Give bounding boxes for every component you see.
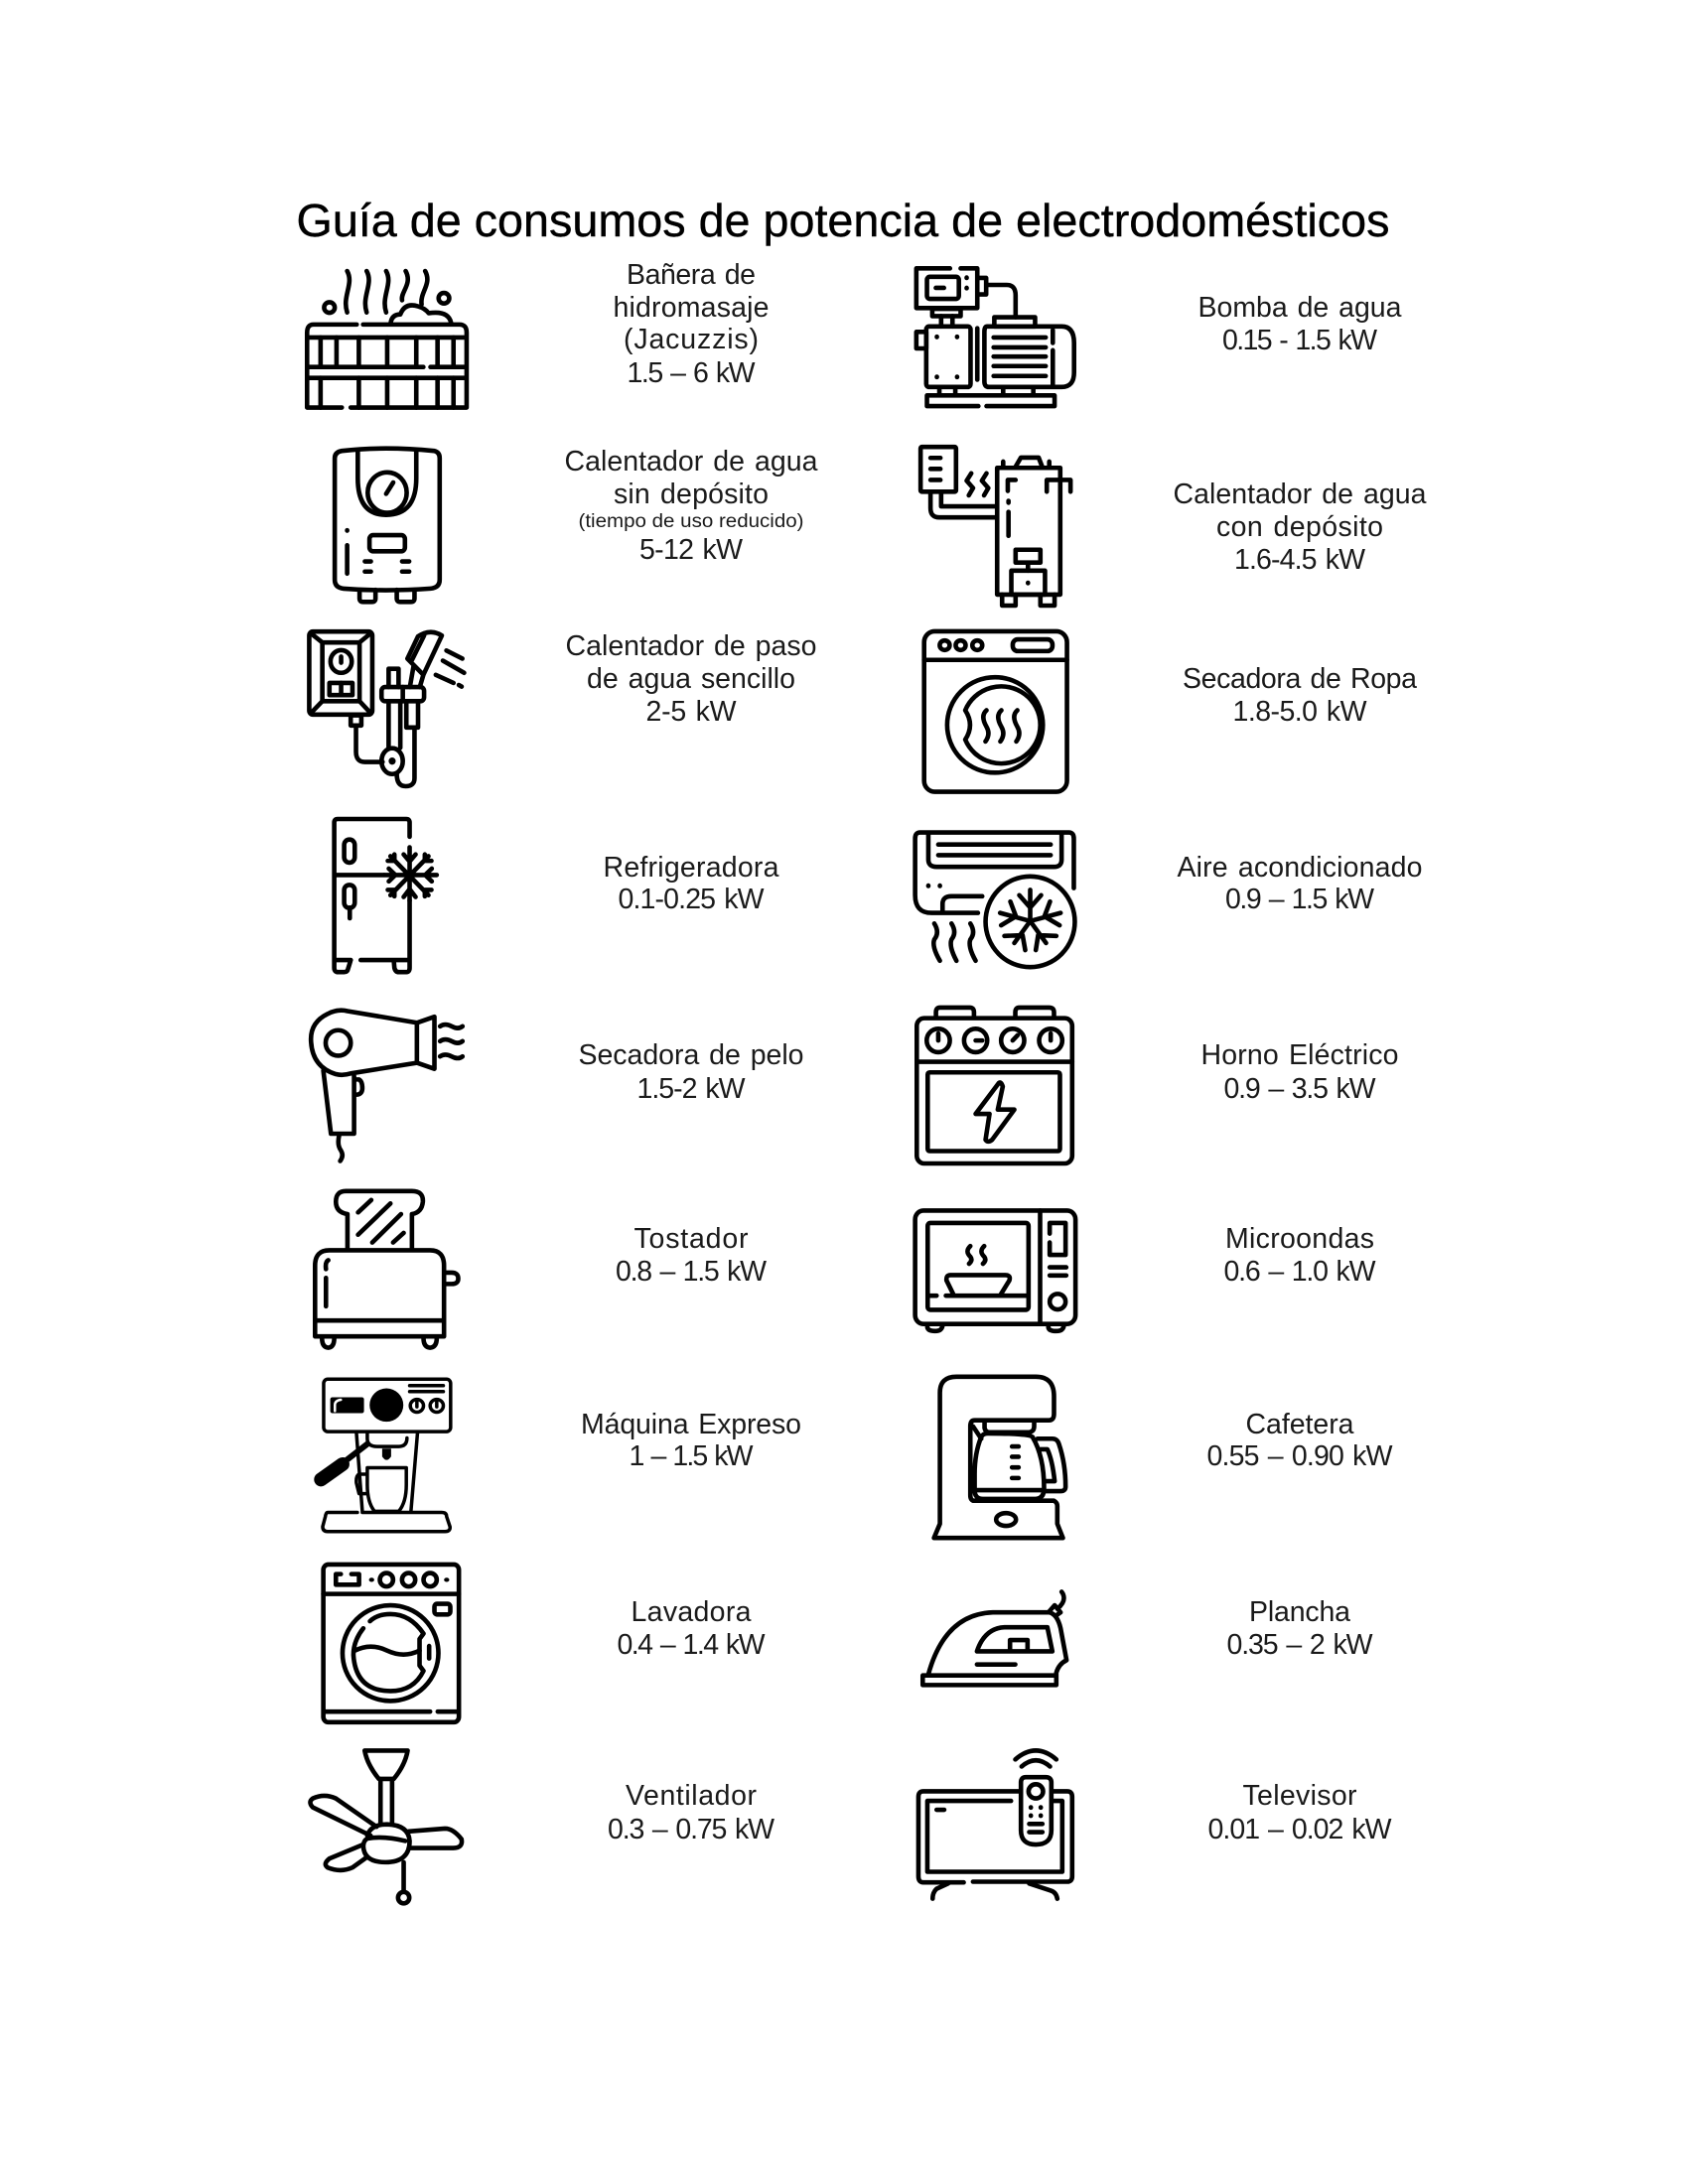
icon: espresso machine (321, 1379, 451, 1532)
label: electric oven: Horno Eléctrico (1201, 1039, 1398, 1071)
label: tankless water heater: sin depósito (614, 478, 769, 510)
label: clothes dryer (1183, 663, 1417, 728)
label: espresso machine: Máquina Expreso (581, 1409, 801, 1440)
label: television: 0.01 – 0.02 kW (1207, 1814, 1392, 1845)
label: hair dryer: Secadora de pelo (578, 1039, 804, 1071)
icon: hair dryer (311, 1011, 463, 1160)
label: refrigerator: 0.1-0.25 kW (618, 884, 765, 915)
label: ceiling fan: Ventilador (626, 1780, 757, 1812)
label: air conditioner: 0.9 – 1.5 kW (1225, 884, 1374, 915)
label: tank water heater: con depósito (1216, 511, 1383, 543)
label: electric oven: 0.9 – 3.5 kW (1223, 1073, 1376, 1105)
label: clothes dryer: Secadora de Ropa (1183, 663, 1417, 695)
icon: instant shower heater (309, 631, 464, 786)
label: electric oven (1201, 1039, 1398, 1105)
label: washing machine: 0.4 – 1.4 kW (618, 1629, 766, 1661)
label: television: Televisor (1243, 1780, 1357, 1812)
label: coffee maker (1207, 1409, 1393, 1472)
label: hot tub (614, 259, 769, 389)
icon: microwave (915, 1210, 1075, 1331)
label: water pump: Bomba de agua (1197, 292, 1402, 324)
label: clothes iron: 0.35 – 2 kW (1227, 1629, 1373, 1661)
icon: washing machine (324, 1565, 459, 1722)
label: washing machine: Lavadora (632, 1596, 752, 1628)
label: instant shower heater: 2-5 kW (645, 696, 737, 728)
label: coffee maker: Cafetera (1245, 1409, 1354, 1440)
label: hair dryer (578, 1039, 804, 1105)
icon: clothes iron (922, 1591, 1066, 1685)
label: microwave: 0.6 – 1.0 kW (1223, 1256, 1376, 1288)
label: hot tub: hidromasaje (614, 292, 769, 324)
label: air conditioner (1178, 852, 1422, 915)
label: television (1207, 1780, 1392, 1845)
label: water pump (1197, 292, 1402, 356)
label: clothes iron (1227, 1596, 1373, 1661)
label: ceiling fan (608, 1780, 774, 1845)
label: hot tub: Bañera de (627, 259, 756, 291)
icon: hot tub (307, 271, 467, 408)
title: Guía de consumos de potencia de electrodomésticos (296, 195, 1390, 246)
icon: tankless water heater (335, 449, 440, 602)
label: hot tub: 1.5 – 6 kW (628, 357, 756, 389)
label: coffee maker: 0.55 – 0.90 kW (1207, 1440, 1393, 1472)
label: microwave (1223, 1223, 1376, 1288)
label: toaster: 0.8 – 1.5 kW (616, 1256, 767, 1288)
icon: electric oven (916, 1008, 1072, 1163)
label: hair dryer: 1.5-2 kW (637, 1073, 746, 1105)
label: tank water heater: 1.6-4.5 kW (1234, 544, 1365, 576)
label: tankless water heater: Calentador de agua (564, 446, 818, 478)
icon: television with remote (918, 1750, 1072, 1899)
label: toaster (616, 1223, 767, 1288)
label: espresso machine: 1 – 1.5 kW (630, 1440, 754, 1472)
label: instant shower heater: Calentador de paso (566, 630, 816, 662)
icon: water pump (916, 268, 1074, 406)
icon: refrigerator (335, 819, 437, 972)
label: instant shower heater: de agua sencillo (587, 663, 795, 695)
icon: tank water heater (920, 447, 1070, 606)
label: instant shower heater (566, 630, 816, 728)
label: espresso machine (581, 1409, 801, 1472)
label: refrigerator: Refrigeradora (604, 852, 779, 884)
icon: air conditioner (915, 833, 1074, 967)
label: clothes dryer: 1.8-5.0 kW (1233, 696, 1367, 728)
label: tankless water heater (564, 446, 818, 566)
label: ceiling fan: 0.3 – 0.75 kW (608, 1814, 774, 1845)
label: toaster: Tostador (633, 1223, 749, 1255)
icon: coffee maker (934, 1377, 1065, 1538)
label: tank water heater (1174, 478, 1427, 576)
label: microwave: Microondas (1225, 1223, 1374, 1255)
icon: toaster (315, 1191, 458, 1348)
label: tank water heater: Calentador de agua (1174, 478, 1427, 510)
label: clothes iron: Plancha (1249, 1596, 1350, 1628)
label: water pump: 0.15 - 1.5 kW (1222, 325, 1377, 356)
label: air conditioner: Aire acondicionado (1178, 852, 1422, 884)
label: washing machine (618, 1596, 766, 1661)
label: refrigerator (604, 852, 779, 915)
icon: clothes dryer (924, 631, 1067, 792)
label: tankless water heater: (tiempo de uso reducido) (578, 511, 804, 532)
icon: ceiling fan (310, 1750, 462, 1903)
label: hot tub: (Jacuzzis) (624, 324, 759, 355)
label: tankless water heater: 5-12 kW (639, 534, 743, 566)
